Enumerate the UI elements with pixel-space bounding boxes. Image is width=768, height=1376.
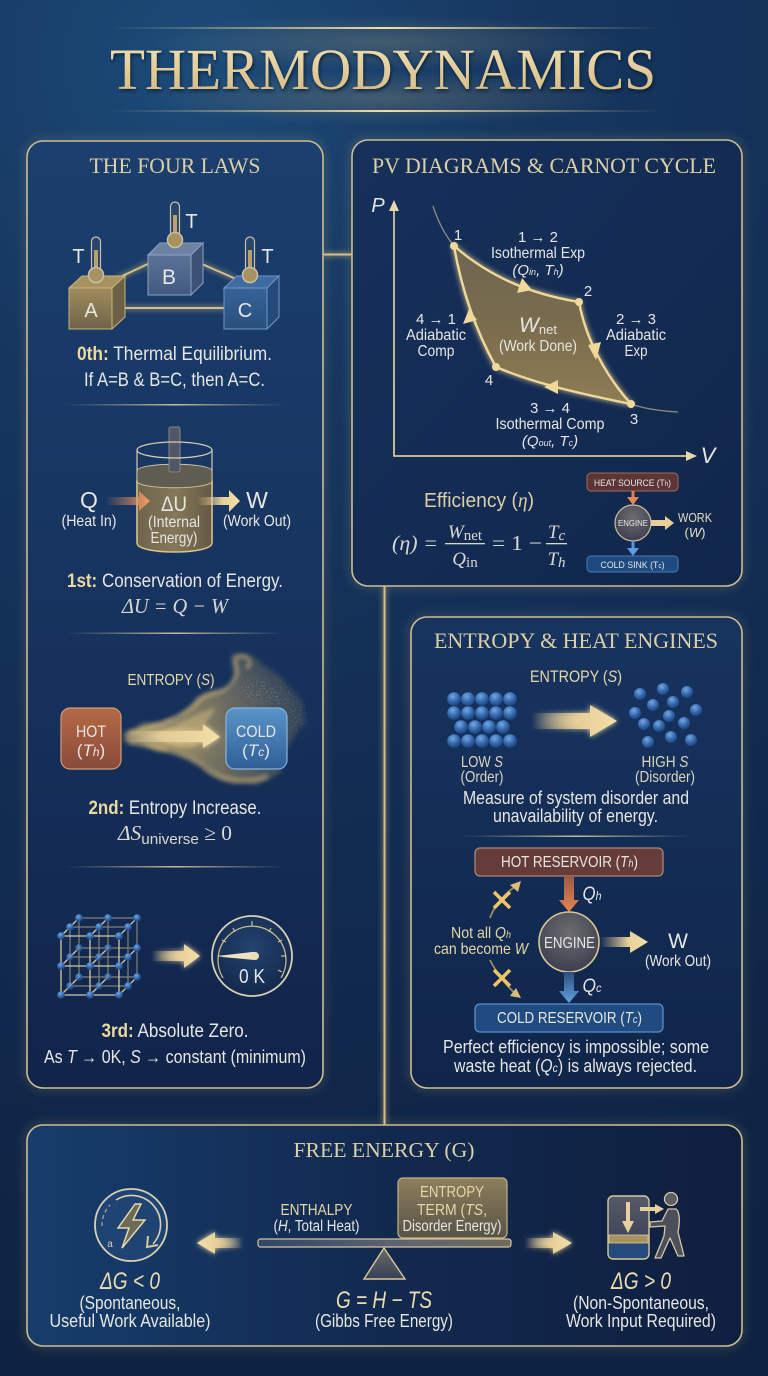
Gibbs equation: G = H − TS [336, 1287, 432, 1314]
1st law text: 1st: Conservation of Energy. [67, 571, 283, 592]
0th law diagram: T [72, 246, 85, 268]
1st law diagram: piston cylinder: Q [80, 487, 98, 513]
entropy definition: unavailability of energy. [493, 806, 658, 826]
efficiency formula: Efficiency (η) [424, 490, 534, 512]
arrow: to spontaneous [197, 1232, 243, 1254]
icon: spontaneous lightning: a [107, 1239, 113, 1250]
label: 1 to 2 [491, 229, 585, 279]
arrow: Qc [559, 972, 579, 1003]
PV chart: 4 [485, 372, 493, 389]
label: 4 to 1: Comp [418, 343, 455, 360]
efficiency formula: h [558, 555, 566, 571]
Gibbs equation: (Gibbs Free Energy) [315, 1311, 453, 1331]
3rd law diagram: crystal lattice [57, 914, 141, 999]
heat engine diagram: Qc [582, 976, 602, 997]
spontaneous label: ΔG < 0 [99, 1268, 161, 1295]
efficiency formula: c [558, 528, 565, 544]
entropy term box: ENTROPY [420, 1184, 484, 1201]
efficiency formula: (η) = [392, 531, 438, 555]
arrow: blocked conversion down [490, 960, 521, 998]
2nd law diagram: hot to cold [61, 654, 305, 785]
efficiency formula: T [547, 549, 559, 570]
heat engine diagram: (Work Out) [645, 953, 711, 970]
hot box: HOT [76, 722, 106, 741]
icon: 0 K gauge [212, 916, 292, 996]
cold box [226, 708, 287, 769]
hot reservoir: HOT RESERVOIR (Th) [501, 854, 638, 871]
heat engine diagram [434, 848, 711, 1032]
axes: V [701, 443, 718, 468]
icon: thermometer B [168, 202, 182, 248]
mini engine diagram [587, 473, 712, 572]
high entropy particles [629, 683, 702, 748]
panel: PV diagrams and Carnot cycle [352, 140, 742, 586]
0th law text: 0th: Thermal Equilibrium. [77, 344, 272, 365]
entropy definition: Measure of system disorder and [463, 788, 689, 808]
spontaneous label: (Spontaneous, [80, 1293, 180, 1313]
arrow: order to disorder [532, 705, 617, 737]
label: 1 to 2: 1 → 2 [518, 229, 558, 246]
label: net work [499, 314, 577, 355]
panel: the four laws [27, 141, 323, 1088]
entropy diagram: LOW S [461, 754, 503, 771]
heading: PV diagrams: PV DIAGRAMS & CARNOT CYCLE [372, 153, 716, 178]
PV chart: 1 [454, 227, 462, 244]
cold reservoir [475, 1004, 663, 1032]
0th law diagram: T [185, 211, 198, 233]
icon: thermometer C [242, 237, 258, 282]
note: not all heat: can become W [434, 941, 530, 958]
icon: block B [148, 243, 203, 295]
2nd law diagram: hot to cold: ENTROPY (S) [128, 672, 214, 689]
icon: block B: B [162, 266, 176, 289]
hot reservoir [475, 848, 663, 876]
heat source: HEAT SOURCE (Th) [594, 478, 671, 489]
engine: ENGINE [618, 518, 648, 528]
label: 2 to 3: Exp [624, 343, 648, 360]
panel: free energy [27, 1125, 742, 1346]
arrow: heat in [105, 491, 150, 511]
heading: free energy: FREE ENERGY (G) [294, 1138, 475, 1162]
1st law diagram: piston cylinder: W [246, 487, 268, 513]
enthalpy label: (H, Total Heat) [274, 1218, 360, 1235]
label: 3 to 4: Isothermal Comp [496, 416, 605, 433]
heading: the four laws: THE FOUR LAWS [90, 153, 260, 178]
PV chart [371, 195, 718, 468]
1st law diagram: piston cylinder: Energy) [150, 530, 198, 547]
entropy diagram: ENTROPY (S) [530, 667, 622, 686]
3rd law text: As T → 0K, S → constant (minimum) [44, 1047, 306, 1067]
2nd law text: universe [141, 831, 199, 848]
label: net work: W [519, 314, 541, 337]
label: 4 to 1: 4 → 1 [416, 311, 456, 328]
arrow: to non-spontaneous [525, 1232, 572, 1254]
label: 2 to 3: Adiabatic [606, 327, 666, 344]
hot box [61, 708, 121, 769]
arrow: Qh [559, 876, 579, 912]
note: not all heat: Not all Qh [451, 925, 511, 942]
non-spontaneous label: (Non-Spontaneous, [573, 1293, 709, 1313]
efficiency formula: W [448, 522, 466, 543]
efficiency formula: T [548, 522, 560, 543]
label: 3 to 4: (Qout, Tc) [522, 433, 578, 450]
entropy diagram: (Disorder) [635, 769, 695, 786]
PV chart: 2 [584, 283, 592, 300]
connectors [323, 254, 384, 1125]
title: THERMODYNAMICS [110, 37, 656, 102]
entropy diagram [447, 667, 702, 786]
heat engine diagram: Qh [582, 884, 602, 905]
efficiency formula: in [466, 555, 478, 571]
hot box: (Th) [77, 741, 105, 760]
0th law text: If A=B & B=C, then A=C. [84, 370, 265, 391]
icon: thermometer A [88, 237, 104, 282]
entropy term box: TERM (TS, [417, 1202, 487, 1219]
label: net work: net [539, 322, 557, 337]
engine conclusion [443, 1037, 709, 1076]
label: 2 to 3: 2 → 3 [616, 311, 656, 328]
engine conclusion: waste heat (Qc) is always rejected. [453, 1056, 697, 1076]
enthalpy label [274, 1202, 360, 1235]
1st law diagram: piston cylinder: (Internal [148, 514, 200, 531]
1st law diagram: piston cylinder: (Work Out) [223, 513, 291, 530]
icon: block C: C [238, 300, 252, 322]
arrow: work out [600, 931, 648, 953]
beam [258, 1239, 511, 1247]
label: 1 to 2: (Qin, Th) [512, 262, 564, 279]
non-spontaneous label: ΔG > 0 [610, 1268, 672, 1295]
non-spontaneous label: Work Input Required) [566, 1311, 716, 1331]
engine: ENGINE [544, 935, 595, 952]
2nd law text: ΔS [118, 821, 141, 845]
icon: block A: A [84, 300, 98, 322]
icon: 0 K gauge: 0 K [239, 966, 266, 988]
2nd law text: ≥ 0 [199, 821, 232, 845]
header [110, 14, 660, 126]
entropy definition [463, 788, 689, 826]
efficiency formula: net [464, 528, 483, 544]
label: 3 to 4: 3 → 4 [530, 400, 570, 417]
1st law diagram: piston cylinder: ΔU [161, 493, 187, 516]
label: 4 to 1 [406, 311, 466, 360]
PV chart: 3 [630, 411, 638, 428]
arrow: blocked conversion up [490, 881, 521, 918]
label: 2 to 3 [606, 311, 666, 360]
label: 4 to 1: Adiabatic [406, 327, 466, 344]
3rd law text [44, 1021, 306, 1067]
Gibbs equation [315, 1287, 453, 1331]
efficiency formula: Q [452, 549, 466, 570]
entropy smoke [125, 654, 305, 785]
heat engine diagram: W [668, 930, 688, 953]
efficiency formula: = 1 − [492, 531, 542, 555]
entropy term box [398, 1178, 507, 1238]
engine [539, 912, 599, 972]
entropy diagram: (Order) [460, 769, 504, 786]
mini engine diagram: WORK [678, 510, 712, 525]
3rd law text: 3rd: Absolute Zero. [102, 1021, 248, 1042]
label: net work: (Work Done) [499, 338, 577, 355]
low entropy particles [447, 692, 517, 748]
cycle area [450, 242, 635, 408]
non-spontaneous label [566, 1268, 716, 1331]
1st law text: ΔU = Q − W [121, 594, 230, 618]
1st law diagram: piston cylinder [62, 427, 291, 552]
engine conclusion: Perfect efficiency is impossible; some [443, 1037, 709, 1057]
1st law diagram: piston cylinder: (Heat In) [62, 513, 116, 530]
cold box: (Tc) [242, 741, 270, 760]
0th law diagram: T [261, 246, 274, 268]
icon: block C [224, 276, 279, 329]
fulcrum [364, 1248, 405, 1279]
label: 3 to 4 [496, 400, 605, 450]
cold sink: COLD SINK (Tc) [600, 560, 664, 571]
icon: work input person [608, 1192, 684, 1259]
arrow: cooling to zero [152, 944, 200, 968]
label: 1 to 2: Isothermal Exp [491, 245, 585, 262]
cold box: COLD [236, 722, 276, 741]
2nd law text [88, 798, 262, 848]
0th law diagram [69, 202, 279, 329]
spontaneous label: Useful Work Available) [50, 1311, 210, 1331]
axes [371, 195, 718, 468]
mini engine diagram: (W) [685, 525, 705, 540]
entropy term box: Disorder Energy) [402, 1218, 502, 1235]
panel: entropy and heat engines [411, 617, 742, 1088]
1st law text [67, 571, 283, 618]
enthalpy label: ENTHALPY [280, 1202, 353, 1219]
icon: block A [69, 276, 125, 329]
arrow: entropy flow [124, 724, 220, 748]
0th law text [77, 344, 272, 391]
axes: P [371, 195, 385, 217]
2nd law text: 2nd: Entropy Increase. [88, 798, 262, 819]
icon: spontaneous lightning [95, 1189, 167, 1261]
spontaneous label [50, 1268, 210, 1331]
cold reservoir: COLD RESERVOIR (Tc) [497, 1010, 642, 1027]
entropy diagram: HIGH S [642, 754, 689, 771]
efficiency formula [392, 490, 567, 571]
heading: entropy and heat engines: ENTROPY & HEAT ENGINES [434, 628, 718, 653]
note: not all heat [434, 925, 530, 958]
arrow: work out [197, 490, 240, 512]
balance scale [258, 1178, 511, 1279]
